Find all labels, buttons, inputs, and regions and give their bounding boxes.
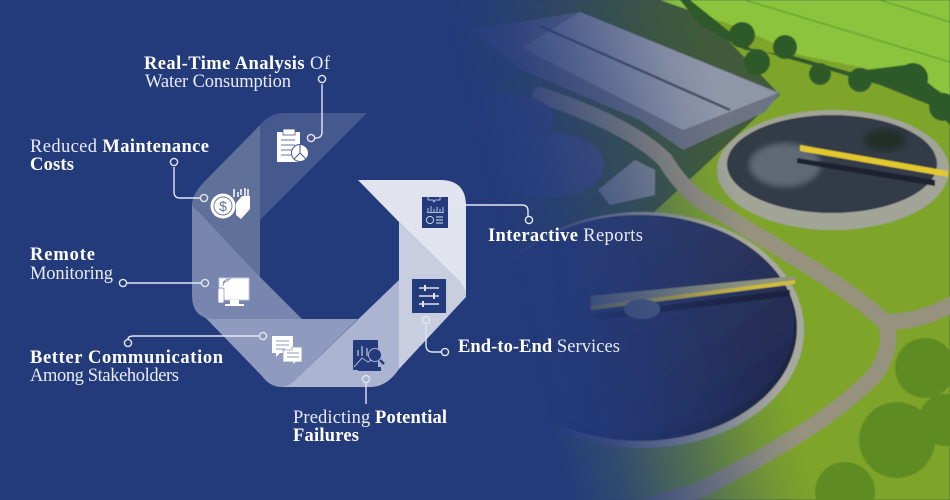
label: better communication [30,348,224,386]
lower tank [480,212,804,448]
lower tank bridge [591,276,795,310]
green field [660,0,950,95]
lower right trees [815,338,950,500]
label: remote monitoring: Monitoring [30,264,113,284]
road [540,95,950,500]
concrete structure [598,160,655,205]
segment: end-to-end [399,222,466,369]
label: better communication: Among Stakeholders [30,366,179,386]
icon: sliders panel [412,279,446,313]
segment: real-time analysis [260,113,367,220]
icon: report sheet [422,197,448,228]
label: better communication: Better Communication [30,348,224,368]
label: real-time analysis [144,54,331,92]
icon: clipboard with pie chart [277,129,308,162]
label: predicting potential failures: Failures [293,426,359,446]
hedge and trees [600,0,950,125]
label: predicting potential failures [293,408,447,446]
connector: interactive reports [452,201,533,224]
label: end-to-end services: End-to-End Services [458,337,620,357]
icon: coin and hand [210,188,250,219]
connector: communication [124,332,267,347]
connector: predicting failures [362,375,370,404]
label: predicting potential failures: Predicting Potential [293,408,447,428]
label: reduced maintenance costs: Costs [30,155,74,175]
icon: chat bubbles [272,336,302,365]
photo: water treatment plant [450,0,950,500]
segment: communication [199,311,358,387]
upper tank [717,110,949,230]
segment: interactive reports [358,180,466,297]
label: real-time analysis: Water Consumption [145,72,291,92]
octagon cycle diagram [192,113,466,387]
label: real-time analysis: Real-Time Analysis Of [144,54,331,74]
long roofed building [470,12,780,150]
icon: report with magnifier [353,340,384,371]
icon: monitor with remote [218,278,249,306]
label: reduced maintenance costs [30,137,209,175]
connector: real-time analysis [307,75,326,142]
segment: predicting failures [279,280,399,387]
icon: coin and hand: $ [219,198,227,214]
upper tank bridge [800,145,948,177]
label: remote monitoring [30,245,113,284]
field stripes [745,0,950,62]
connector: remote monitoring [119,279,209,287]
label: remote monitoring: Remote [30,245,95,265]
connector: maintenance [170,158,208,202]
label: interactive reports: Interactive Reports [488,226,643,246]
background tanks [455,94,555,142]
segment: remote monitoring [192,203,302,319]
dark grass near plant [450,0,780,260]
photo fade overlay [420,0,950,500]
segment: maintenance [192,125,260,277]
connector: end-to-end [422,316,449,356]
label: reduced maintenance costs: Reduced Maintenance [30,137,209,157]
